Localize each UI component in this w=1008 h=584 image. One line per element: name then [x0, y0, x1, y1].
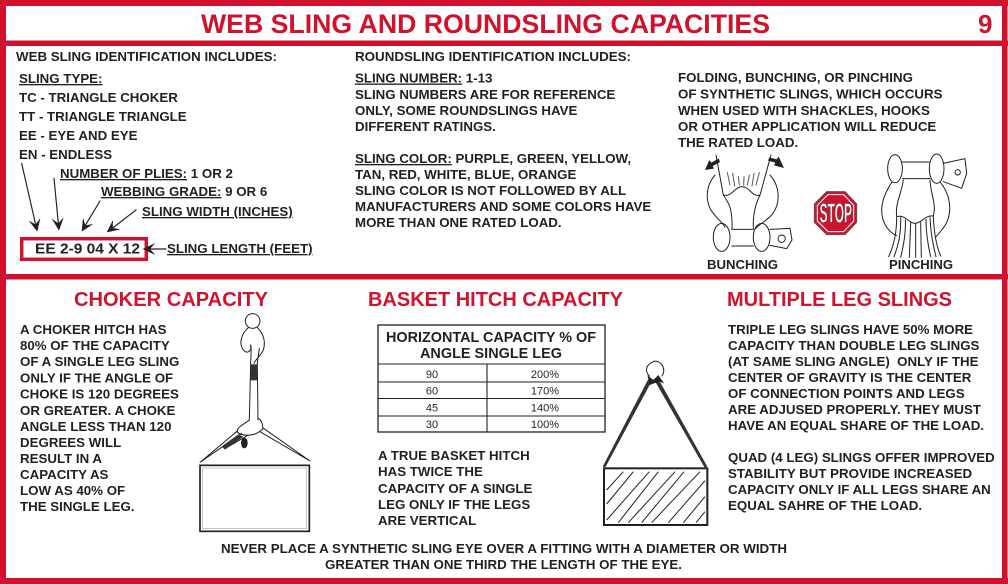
icon: stop sign: STOP	[820, 198, 852, 229]
page number: 9	[978, 9, 992, 39]
table: horizontal capacity: 30	[426, 419, 438, 431]
text: choker description: 80% OF THE CAPACITY	[20, 338, 170, 353]
text: triple leg slings: CENTER OF GRAVITY IS THE CENTER	[728, 370, 972, 385]
footer warning: GREATER THAN ONE THIRD THE LENGTH OF THE EYE.	[325, 557, 682, 572]
text: sling number: SLING NUMBERS ARE FOR REFERENCE	[355, 87, 615, 102]
heading: basket hitch capacity: BASKET HITCH CAPACITY	[368, 289, 624, 311]
label: number of plies: NUMBER OF PLIES: 1 OR 2	[60, 166, 233, 181]
text: choker description: RESULT IN A	[20, 451, 102, 466]
heading: roundsling identification: ROUNDSLING IDENTIFICATION INCLUDES:	[355, 49, 631, 64]
text: sling color: TAN, RED, WHITE, BLUE, ORANGE	[355, 167, 576, 182]
text: sling color: SLING COLOR IS NOT FOLLOWED BY ALL	[355, 183, 626, 198]
text: basket description: ARE VERTICAL	[378, 513, 476, 528]
table: horizontal capacity: ANGLE SINGLE LEG	[420, 345, 562, 362]
text: quad leg slings: QUAD (4 LEG) SLINGS OFFER IMPROVED	[728, 450, 995, 465]
text: choker description: OF A SINGLE LEG SLING	[20, 354, 179, 369]
text: triple leg slings: CAPACITY THAN DOUBLE LEG SLINGS	[728, 338, 980, 353]
panel: choker capacity	[20, 289, 310, 531]
text: sling number: DIFFERENT RATINGS.	[355, 119, 496, 134]
text: folding warning: FOLDING, BUNCHING, OR PINCHING	[678, 70, 913, 85]
panel: basket hitch capacity	[368, 289, 707, 528]
text: sling color: MANUFACTURERS AND SOME COLORS HAVE	[355, 199, 651, 214]
text: triple leg slings	[728, 322, 984, 433]
text: choker description: CHOKE IS 120 DEGREES	[20, 386, 179, 402]
text: quad leg slings: EQUAL SAHRE OF THE LOAD.	[728, 498, 922, 513]
text: quad leg slings: CAPACITY ONLY IF ALL LEGS SHARE AN	[728, 482, 991, 497]
table: horizontal capacity: 170%	[531, 386, 559, 398]
text: choker description: DEGREES WILL	[20, 435, 121, 450]
text: folding warning: WHEN USED WITH SHACKLES, HOOKS	[678, 103, 930, 118]
text: choker description: LOW AS 40% OF	[20, 483, 125, 498]
panel: multiple leg slings	[727, 289, 995, 513]
sling type list: SLING TYPE:	[19, 71, 102, 86]
text: sling number	[355, 70, 615, 134]
text: quad leg slings: STABILITY BUT PROVIDE INCREASED	[728, 466, 972, 481]
text: basket description: A TRUE BASKET HITCH	[378, 448, 530, 463]
text: choker description: A CHOKER HITCH HAS	[20, 322, 167, 337]
heading: web sling identification: WEB SLING IDENTIFICATION INCLUDES:	[16, 49, 277, 64]
panel: roundsling identification	[355, 49, 651, 230]
text: folding warning: OF SYNTHETIC SLINGS, WHICH OCCURS	[678, 86, 943, 102]
table: horizontal capacity: 45	[426, 402, 438, 414]
title: WEB SLING AND ROUNDSLING CAPACITIES	[201, 9, 770, 39]
sling type list: TT - TRIANGLE TRIANGLE	[19, 109, 187, 124]
text: sling color: MORE THAN ONE RATED LOAD.	[355, 215, 562, 230]
text: sling color: SLING COLOR: PURPLE, GREEN, YELLOW,	[355, 151, 631, 166]
icon: bunching shackle	[705, 155, 792, 251]
text: folding warning: THE RATED LOAD.	[678, 135, 798, 150]
heading: choker capacity: CHOKER CAPACITY	[74, 289, 269, 311]
text: basket description: HAS TWICE THE	[378, 464, 483, 479]
table: horizontal capacity	[378, 325, 605, 432]
text: folding warning: OR OTHER APPLICATION WILL REDUCE	[678, 119, 936, 134]
text: triple leg slings: HAVE AN EQUAL SHARE OF THE LOAD.	[728, 418, 984, 433]
footer warning: NEVER PLACE A SYNTHETIC SLING EYE OVER A FITTING WITH A DIAMETER OR WIDTH	[221, 541, 787, 556]
sling type list	[19, 71, 187, 162]
table: horizontal capacity: 60	[426, 386, 438, 398]
icon: stop sign	[814, 192, 857, 235]
sling type list: EN - ENDLESS	[19, 147, 112, 162]
icon: pinching shackle	[882, 154, 967, 257]
panel: web sling identification	[16, 49, 313, 259]
text: choker description: OR GREATER. A CHOKE	[20, 403, 176, 418]
sling type list: EE - EYE AND EYE	[19, 128, 138, 143]
arrows to sling code	[22, 163, 166, 255]
text: choker description: ANGLE LESS THAN 120	[20, 419, 171, 434]
text: folding warning	[678, 70, 943, 150]
label: sling width: SLING WIDTH (INCHES)	[142, 204, 293, 219]
label: pinching: PINCHING	[889, 257, 953, 272]
illustration: choker hitch	[200, 314, 310, 531]
text: basket description: LEG ONLY IF THE LEGS	[378, 497, 530, 512]
table: horizontal capacity: HORIZONTAL CAPACITY % OF	[386, 329, 596, 346]
label: bunching: BUNCHING	[707, 257, 778, 272]
text: quad leg slings	[728, 450, 995, 513]
heading: multiple leg slings: MULTIPLE LEG SLINGS	[727, 289, 952, 311]
sling code box	[22, 239, 146, 259]
text: choker description: CAPACITY AS	[20, 467, 109, 482]
text: sling number: ONLY, SOME ROUNDSLINGS HAVE	[355, 103, 578, 118]
text: choker description	[20, 322, 179, 514]
text: sling number: SLING NUMBER: 1-13	[355, 70, 492, 86]
label: webbing grade: WEBBING GRADE: 9 OR 6	[101, 184, 267, 199]
table: horizontal capacity: 140%	[531, 402, 559, 414]
text: triple leg slings: TRIPLE LEG SLINGS HAVE 50% MORE	[728, 322, 973, 337]
table: horizontal capacity: 100%	[531, 419, 559, 431]
table: horizontal capacity: 90	[426, 369, 438, 381]
label: sling length: SLING LENGTH (FEET)	[167, 241, 313, 256]
text: sling color	[355, 151, 651, 230]
panel: bunching and pinching	[678, 70, 967, 272]
text: basket description: CAPACITY OF A SINGLE	[378, 481, 533, 496]
text: triple leg slings: ARE ADJUSED PROPERLY. THEY MUST	[728, 402, 981, 417]
text: basket description	[378, 448, 533, 528]
sling type list: TC - TRIANGLE CHOKER	[19, 90, 178, 105]
text: triple leg slings: OF CONNECTION POINTS AND LEGS	[728, 386, 965, 401]
illustration: basket hitch	[603, 361, 707, 525]
text: triple leg slings: (AT SAME SLING ANGLE) ONLY IF THE	[728, 354, 979, 369]
text: choker description: THE SINGLE LEG.	[20, 499, 135, 514]
footer warning	[221, 541, 787, 572]
table: horizontal capacity: 200%	[531, 369, 559, 381]
text: choker description: ONLY IF THE ANGLE OF	[20, 370, 173, 386]
sling code box: EE 2-9 04 X 12	[35, 240, 140, 258]
